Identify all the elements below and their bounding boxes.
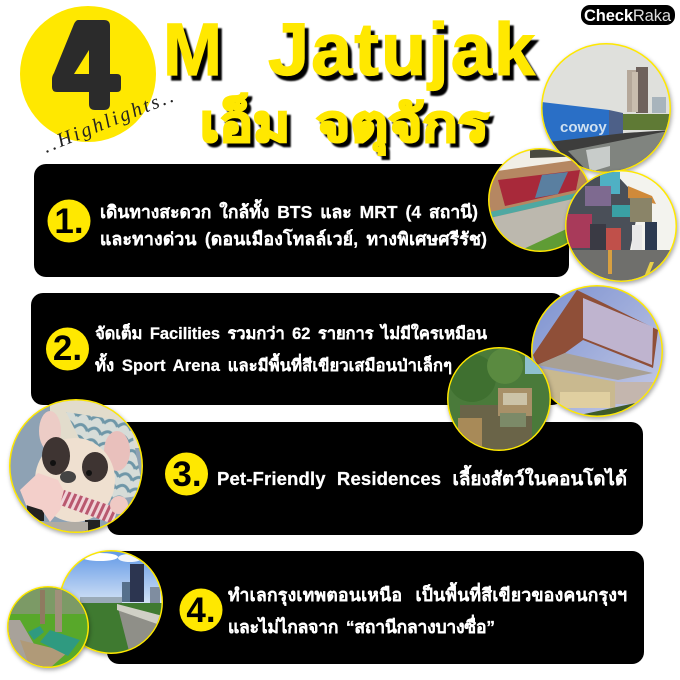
title: M Jatujak [163,8,540,96]
photo: french bulldog [8,398,144,534]
number badge 2: 2. [53,329,82,368]
panel 1: transport [34,164,569,277]
number badge 1 [48,200,90,242]
photo: sports building [530,284,665,420]
panel 2 text: จัดเต็ม Facilities รวมกว่า 62 รายการ ไม่มีใครเหมือน [95,322,488,343]
panel 3 text: Pet-Friendly Residences เลี้ยงสัตว์ในคอนโดได้ [217,465,627,489]
photo: BTS train: cowoy [560,119,607,136]
number badge 3 [165,452,208,496]
panel 2: facilities [31,293,564,405]
number badge 3: 3. [172,455,202,494]
photo: park bench [7,586,89,668]
title: M Jatujak: M [167,13,226,96]
subtitle: Thai title [200,93,493,159]
panel 3: pet friendly [107,422,643,535]
subtitle: Thai title: จตุจักร [320,100,493,159]
panel 1 text: เดินทางสะดวก ใกล้ทั้ง BTS และ MRT (4 สถานี) [100,199,478,222]
title: M Jatujak: Jatujak [268,8,536,91]
heading badge: 4 Highlights [20,6,177,158]
panel 2 text: ทั้ง Sport Arena และมีพื้นที่สีเขียวเสมือนป่าเล็กๆ [95,353,452,375]
panel 1 text [100,199,487,249]
title: M Jatujak: M [163,8,222,91]
heading badge: 4 Highlights: ..Highlights.. [40,85,177,158]
number badge 1: 1. [54,202,84,241]
title: M Jatujak: Jatujak [272,13,540,96]
number badge 4 [180,588,222,632]
panel 2 text [95,322,488,375]
panel 1 text: และทางด่วน (ดอนเมืองโทลล์เวย์, ทางพิเศษศรีรัช) [100,228,487,249]
photo: market sign [488,148,592,252]
photo: street market [564,170,678,282]
panel 4: green area [107,551,644,664]
number badge 4: 4. [186,591,216,630]
logo: CheckRaka: CheckRaka [584,7,672,25]
panel 4 text [228,582,627,637]
subtitle: Thai title: จตุจักร [316,96,489,155]
number badge 2 [46,328,89,370]
subtitle: Thai title: เอ็ม [204,97,294,156]
photo: garden building [447,347,552,451]
panel 4 text: และไม่ไกลจาก “สถานีกลางบางซื่อ” [228,614,495,637]
photo: BTS train [540,43,675,174]
panel 4 text: ทำเลกรุงเทพตอนเหนือ เป็นพื้นที่สีเขียวของคนกรุงฯ [228,582,627,606]
subtitle: Thai title: เอ็ม [200,93,290,152]
photo: city skyline [59,550,163,655]
